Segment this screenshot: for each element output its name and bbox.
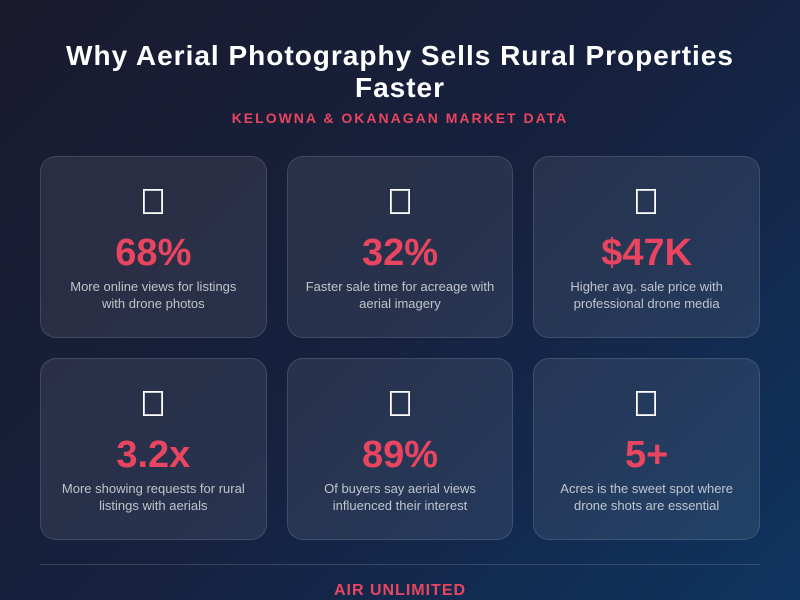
stat: 3.2x: 3.2x [116,434,190,476]
description: faster sale: Faster sale time for acreage with aerial imagery [306,279,494,311]
icon: placeholder box [390,189,410,214]
footer brand: AIR UNLIMITED [334,582,466,599]
icon: placeholder box [143,189,163,214]
panel: 68% online views [40,156,267,338]
stat: 68%: 68% [115,232,191,274]
panel: 89% of buyers [287,358,513,540]
description: buyers: Of buyers say aerial views influenced their interest [324,481,476,513]
stat: 32%: 32% [362,232,438,274]
icon: placeholder box [143,391,163,416]
stat: 5+: 5+ [625,434,668,476]
panel: 3.2x showing requests [40,358,267,540]
icon: placeholder box [636,189,656,214]
icon: placeholder box [636,391,656,416]
description: online views: More online views for listings with drone photos [70,279,236,311]
panel: $47K sale price [533,156,760,338]
stat: $47K: $47K [601,232,692,274]
description: acres: Acres is the sweet spot where drone shots are essential [560,481,733,513]
icon: placeholder box [390,391,410,416]
panel: 5+ acres [533,358,760,540]
title: Why Aerial Photography Sells Rural Properties Faster [66,40,734,103]
description: sale price: Higher avg. sale price with professional drone media [570,279,723,311]
subtitle: KELOWNA & OKANAGAN MARKET DATA [232,110,568,126]
panel: 32% faster sale [287,156,513,338]
stat: 89%: 89% [362,434,438,476]
description: showing requests: More showing requests for rural listings with aerials [62,481,245,513]
